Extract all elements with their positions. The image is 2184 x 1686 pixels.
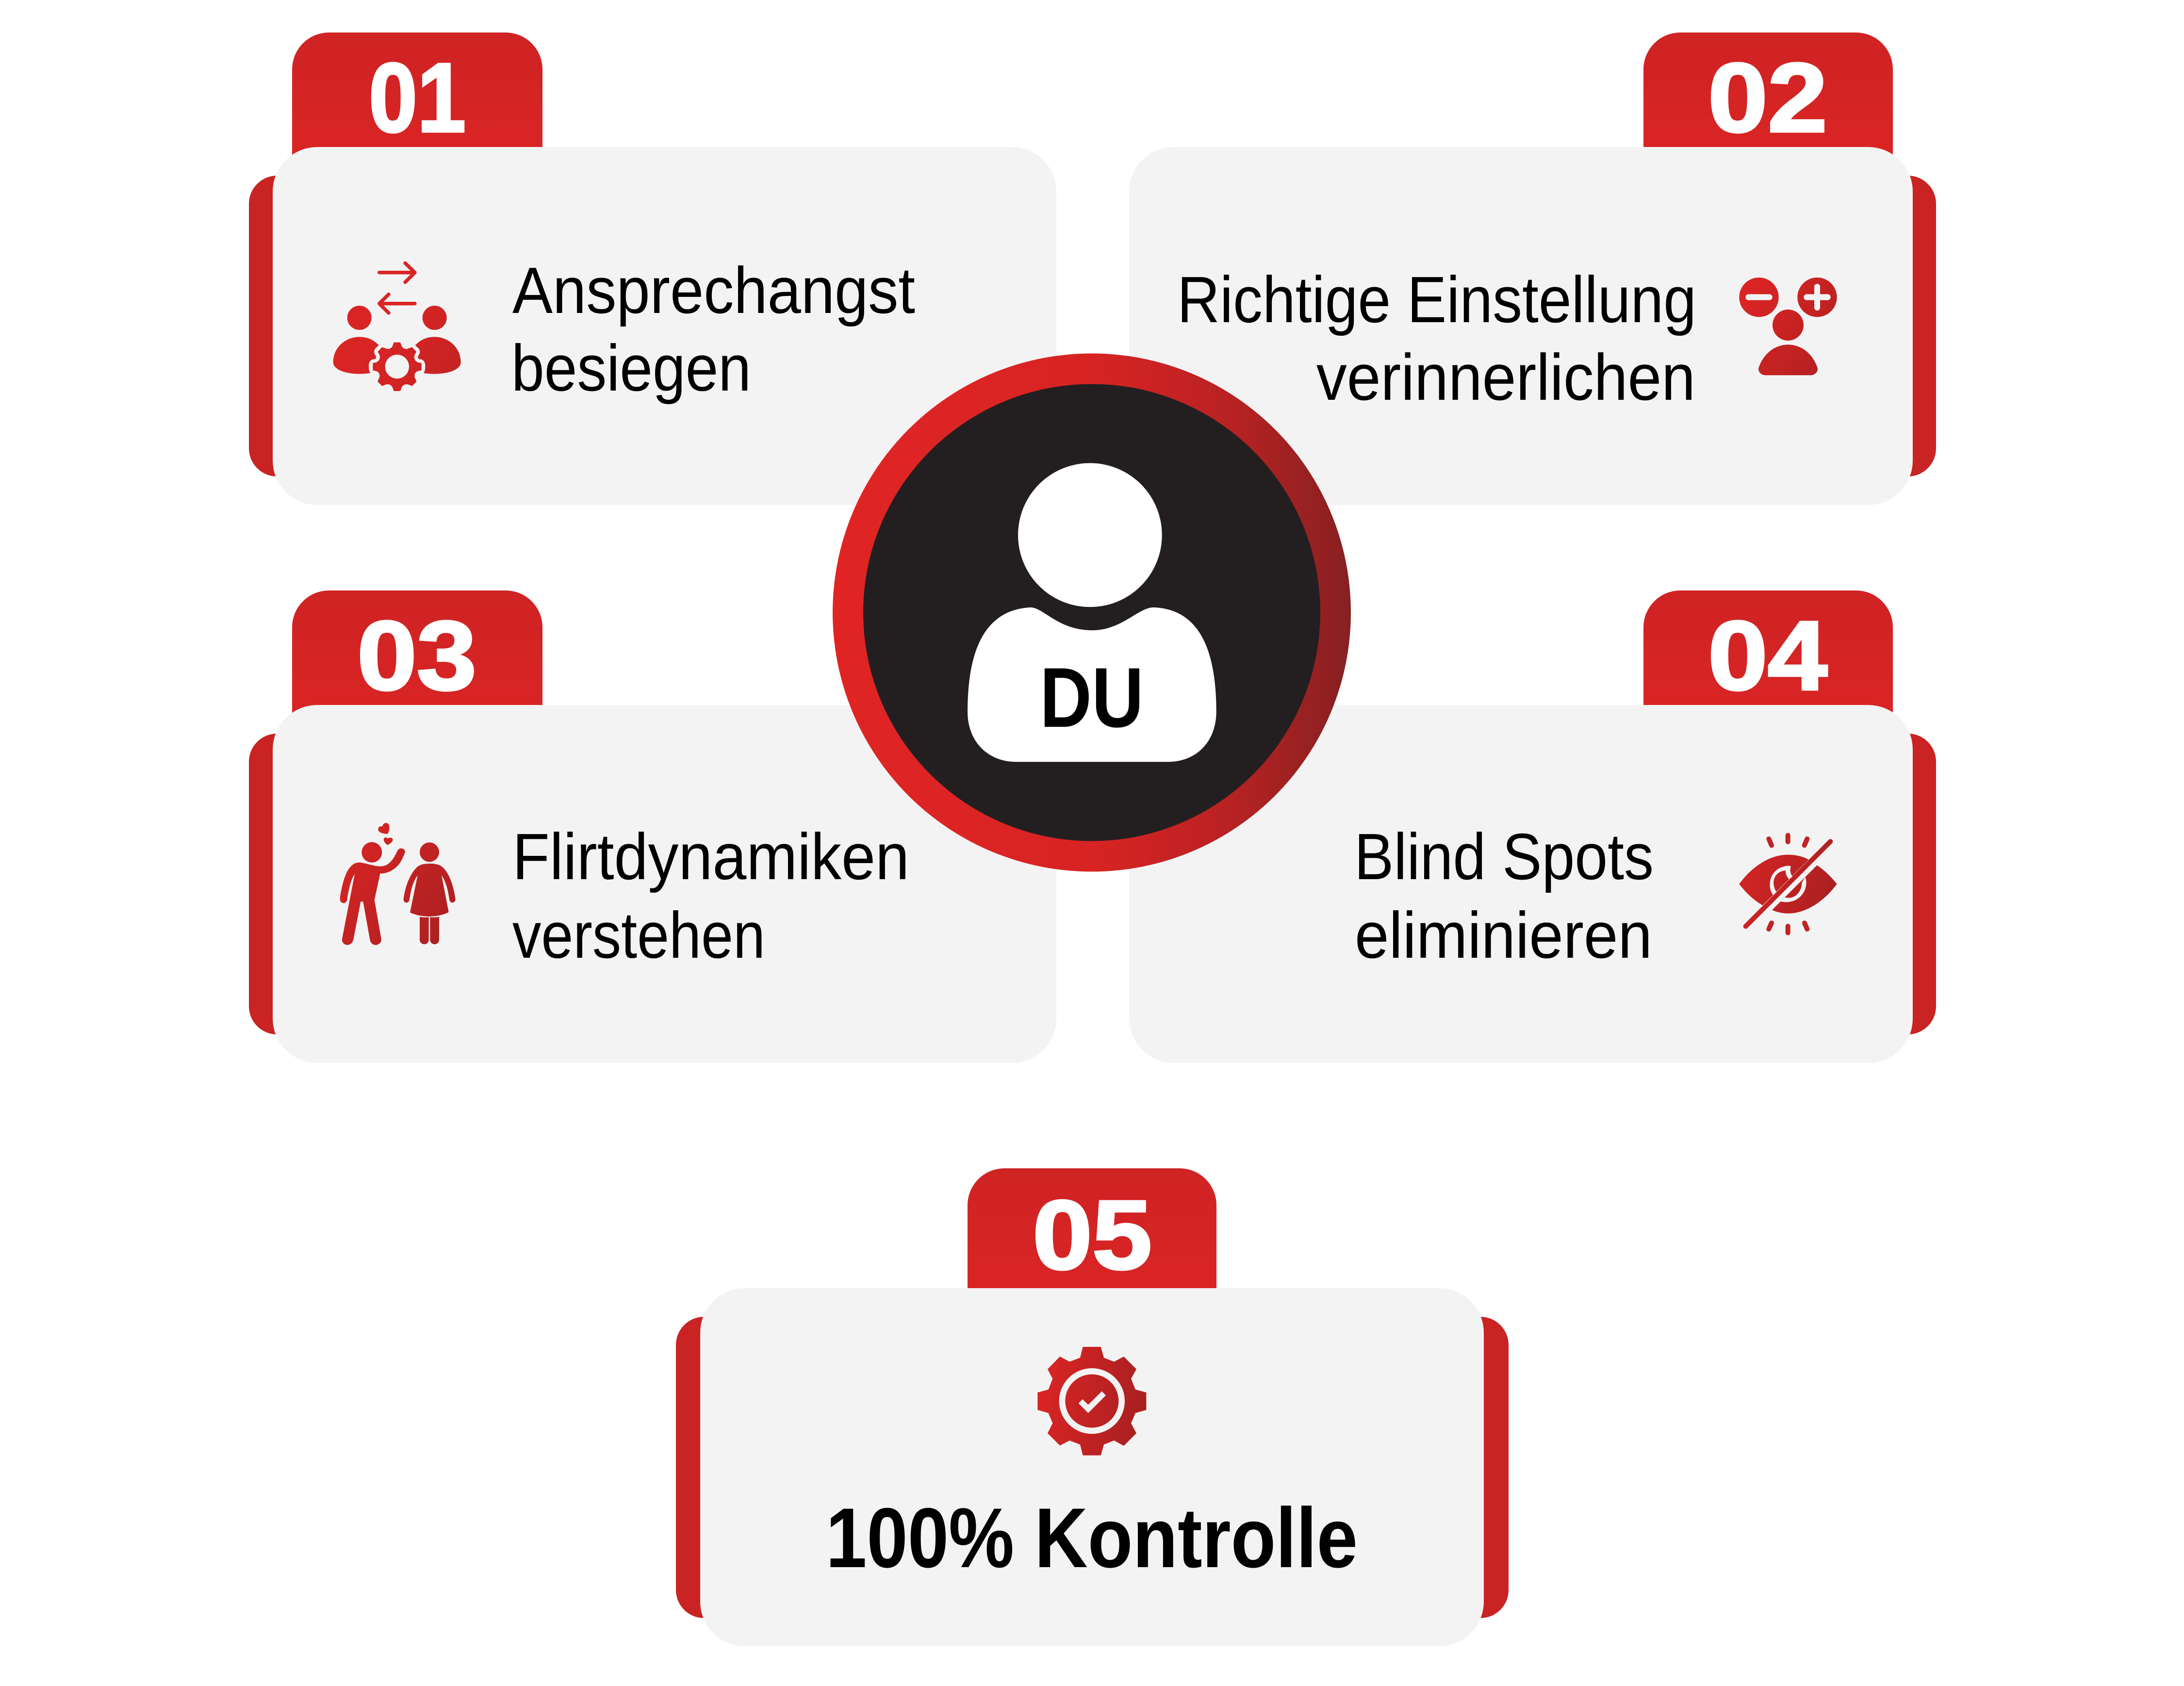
- red back edge 03: [249, 734, 346, 1034]
- card 05 background: [700, 1288, 1484, 1646]
- panel: card 04: [1129, 590, 1936, 1063]
- text: 100% Kontrolle: 100% Kontrolle: [826, 1491, 1358, 1586]
- tab 02: [1643, 33, 1893, 178]
- text: Flirtdynamiken verstehen: [512, 820, 909, 972]
- red back edge 05 left: [676, 1317, 773, 1618]
- card 02 background: [1129, 147, 1913, 505]
- tab 03: [292, 590, 542, 736]
- text: Flirtdynamiken verstehen: Flirtdynamiken: [512, 820, 909, 893]
- panel: card 01: [249, 33, 1056, 505]
- icon: gear with check mark: [1037, 1347, 1146, 1456]
- icon: people exchanging with gear: [333, 263, 461, 391]
- card 01 background: [273, 147, 1056, 505]
- icon: crossed-out eye: [1739, 835, 1837, 933]
- tab 01: [292, 33, 542, 178]
- text: Richtige Einstellung verinnerlichen: Richtige Einstellung: [1177, 263, 1696, 336]
- red back edge 04: [1839, 734, 1936, 1034]
- card 03 background: [273, 705, 1056, 1063]
- text: Richtige Einstellung verinnerlichen: verinnerlichen: [1316, 341, 1695, 414]
- red back edge 05 right: [1412, 1317, 1509, 1618]
- tab 04: [1643, 590, 1893, 736]
- text: Ansprechangst besiegen: [511, 254, 915, 405]
- text: Blind Spots eliminieren: Blind Spots: [1354, 820, 1654, 893]
- outer gradient ring: [833, 353, 1351, 871]
- tab 05: [968, 1168, 1216, 1314]
- number 02: 02: [1708, 43, 1827, 152]
- text: Blind Spots eliminieren: eliminieren: [1355, 899, 1652, 972]
- icon: person: [968, 463, 1216, 762]
- label: DU: DU: [1040, 651, 1144, 745]
- card 04 background: [1129, 705, 1913, 1063]
- dark inner circle: [863, 384, 1320, 841]
- central badge: DU: [833, 353, 1351, 871]
- red back edge 02: [1839, 176, 1936, 476]
- red back edge 01: [249, 176, 346, 476]
- number 05: 05: [1033, 1180, 1152, 1290]
- text: Richtige Einstellung verinnerlichen: [1177, 263, 1696, 414]
- number 01: 01: [369, 43, 466, 152]
- text: Ansprechangst besiegen: besiegen: [511, 331, 751, 405]
- panel: card 05: [676, 1168, 1509, 1646]
- panel: card 02: [1129, 33, 1936, 505]
- number 04: 04: [1708, 601, 1827, 710]
- panel: card 03: [249, 590, 1056, 1063]
- icon: flirting couple: [340, 823, 456, 945]
- number 03: 03: [357, 601, 476, 710]
- text: Ansprechangst besiegen: Ansprechangst: [512, 254, 915, 327]
- text: Flirtdynamiken verstehen: verstehen: [512, 899, 765, 972]
- icon: person with minus and plus: [1739, 278, 1837, 375]
- text: Blind Spots eliminieren: [1354, 820, 1654, 972]
